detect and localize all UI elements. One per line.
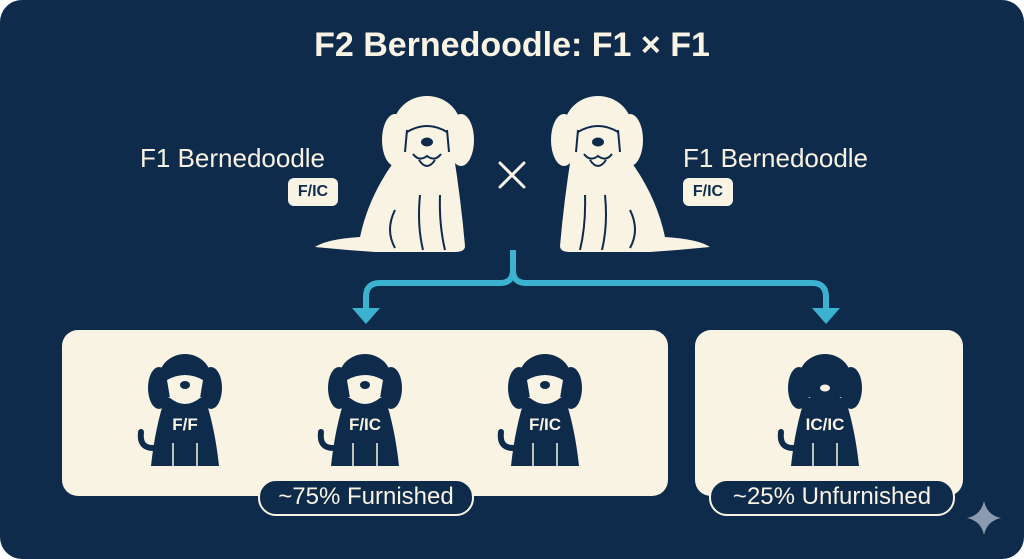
icon: pup F/IC 2 — [501, 354, 582, 466]
icon: pup IC/IC — [781, 354, 862, 466]
icon: cross — [500, 163, 524, 187]
pill: unfurnished: ~25% Unfurnished — [733, 483, 931, 510]
icon: pup F/F — [141, 354, 222, 466]
label: left parent: F1 Bernedoodle — [140, 143, 325, 173]
panel: unfurnished — [695, 330, 963, 496]
icon: pup F/F: F/F — [172, 415, 198, 434]
icon: left parent dog — [315, 96, 474, 252]
panel: furnished — [62, 330, 668, 496]
icon: sparkle — [967, 501, 1001, 535]
badge: left parent genotype: F/IC — [298, 183, 328, 200]
pill: furnished — [258, 479, 474, 516]
icon: right parent dog — [551, 96, 710, 252]
icon: pup IC/IC: IC/IC — [806, 415, 844, 434]
pill: unfurnished — [709, 479, 955, 516]
badge: right parent genotype — [683, 178, 733, 206]
label: right parent: F1 Bernedoodle — [683, 143, 868, 173]
icon: pup F/IC 1 — [321, 354, 402, 466]
title: F2 Bernedoodle: F1 × F1 — [314, 26, 710, 64]
badge: right parent genotype: F/IC — [693, 183, 723, 200]
arrows — [352, 250, 840, 324]
pill: furnished: ~75% Furnished — [278, 483, 454, 510]
icon: pup F/IC 1: F/IC — [349, 415, 381, 434]
badge: left parent genotype — [288, 178, 338, 206]
icon: pup F/IC 2: F/IC — [529, 415, 561, 434]
